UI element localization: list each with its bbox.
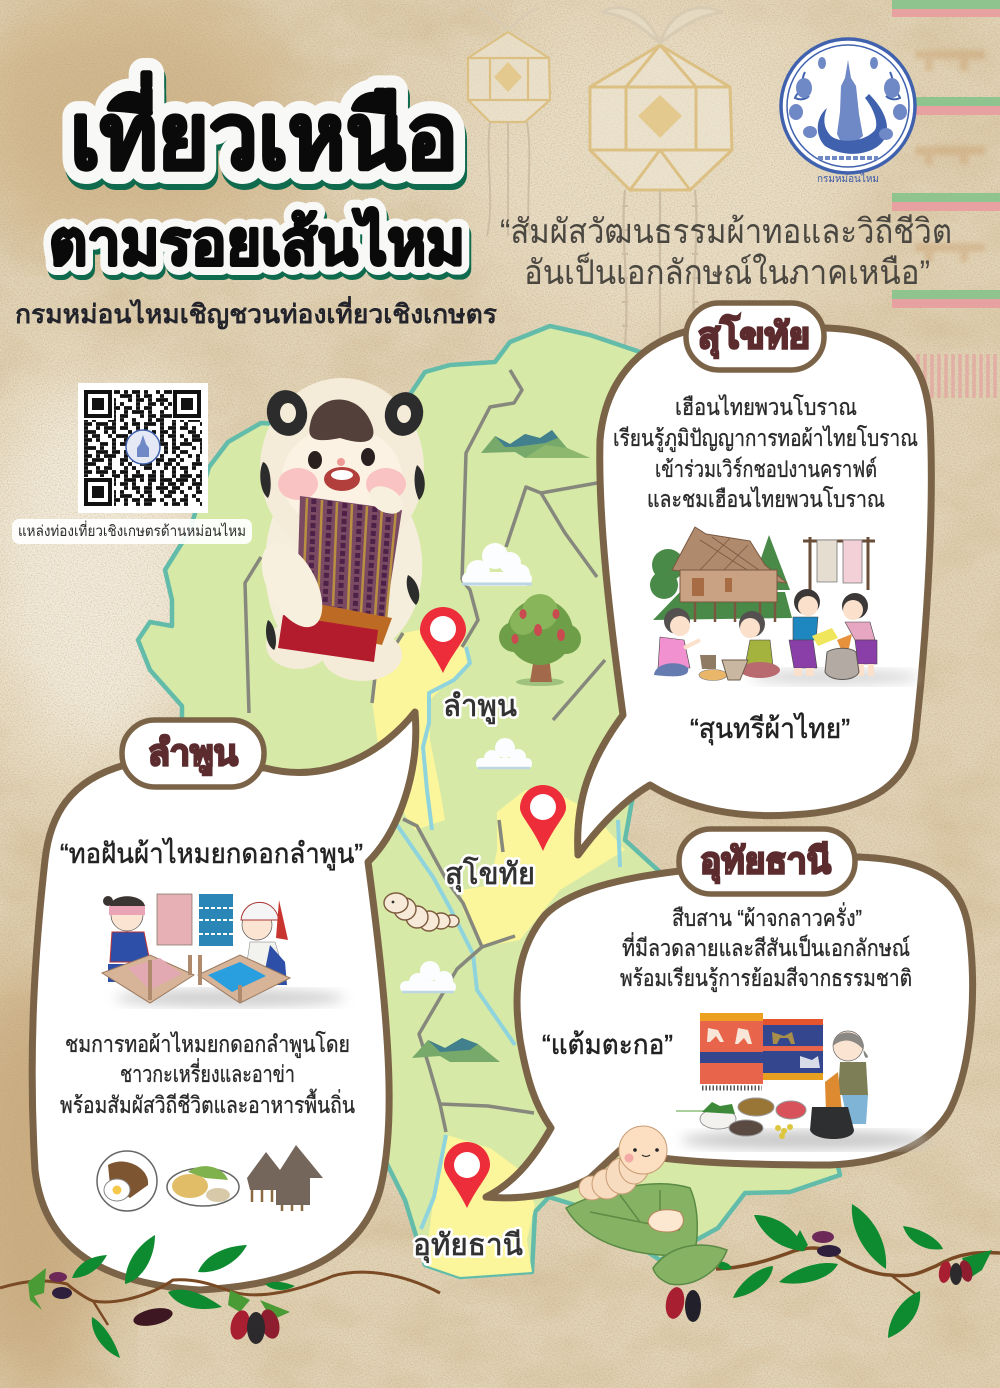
speech bubble Sukhothai [578, 328, 931, 855]
text Uthai Thani: พร้อมเรียนรู้การย้อมสีจากธรรมชาติ [620, 965, 912, 992]
text Sukhothai: และชมเฮือนไทยพวนโบราณ [647, 486, 885, 512]
title: เที่ยวเหนือ [72, 77, 460, 194]
callout Lamphun: “ทอฝันผ้าไหมยกดอกลำพูน” [60, 838, 363, 871]
icon: mountains bottom [412, 1038, 500, 1062]
heading tag Sukhothai [686, 303, 824, 370]
QR code [78, 383, 208, 513]
text Lamphun: ชาวกะเหรี่ยงและอาข่า [120, 1058, 295, 1087]
heading tag Sukhothai: สุโขทัย [698, 314, 810, 359]
lantern: small [468, 8, 550, 236]
map label: Sukhothai: สุโขทัย [445, 856, 535, 893]
heading tag Lamphun [122, 720, 264, 787]
map label: Lamphun: ลำพูน [443, 690, 517, 724]
panel: Lamphun [32, 712, 416, 1290]
icon: clouds [400, 543, 532, 993]
map: rivers [397, 647, 620, 1229]
text Sukhothai: เรียนรู้ภูมิปัญญาการทอผ้าไทยโบราณ [613, 425, 918, 452]
text Sukhothai [613, 394, 918, 512]
text Sukhothai: เข้าร่วมเวิร์กชอปงานคราฟต์ [655, 456, 877, 482]
callout Sukhothai: “สุนทรีผ้าไทย” [690, 713, 850, 746]
illustration: house and villagers [650, 527, 920, 685]
illustration: natural dye and textiles [676, 1013, 931, 1150]
quote: “สัมผัสวัฒนธรรมผ้าทอและวิถีชีวิต [500, 213, 952, 251]
heading tag Lamphun: ลำพูน [148, 732, 238, 776]
title: ตามรอยเส้นไหม [49, 207, 465, 278]
mascot fabric [297, 496, 402, 620]
lantern: large [590, 8, 732, 345]
heading tag Uthai Thani: อุทัยธานี [700, 840, 831, 884]
text Uthai Thani [620, 902, 912, 992]
icon: mountains top [481, 430, 590, 458]
logo: department seal [781, 39, 915, 185]
map: province borders [245, 370, 605, 1132]
pin: Uthai Thani [444, 1142, 490, 1208]
title: ตามรอยเส้นไหม [49, 207, 465, 278]
pin: Sukhothai [520, 785, 566, 851]
vine: bottom right [663, 1204, 1000, 1338]
title [49, 71, 467, 283]
vine: bottom left [0, 1235, 440, 1358]
icon: silkworm on map [384, 893, 459, 931]
map label: Lamphun: ลำพูน [443, 690, 517, 724]
panel: Uthai Thani [486, 829, 973, 1198]
title: เที่ยวเหนือ [70, 71, 458, 188]
map label: Uthai Thani: อุทัยธานี [413, 1229, 523, 1264]
quote [500, 213, 952, 292]
text Uthai Thani: สืบสาน “ผ้าจกลาวครั่ง” [672, 902, 862, 931]
panel: Sukhothai [578, 303, 931, 855]
map label: Sukhothai: สุโขทัย [445, 856, 535, 893]
text Lamphun: พร้อมสัมผัสวิถีชีวิตและอาหารพื้นถิ่น [60, 1089, 355, 1118]
subtitle: กรมหม่อนไหมเชิญชวนท่องเที่ยวเชิงเกษตร [15, 295, 497, 330]
text Uthai Thani: ที่มีลวดลายและสีสันเป็นเอกลักษณ์ [622, 932, 910, 961]
quote: อันเป็นเอกลักษณ์ในภาคเหนือ” [524, 252, 930, 292]
illustration: food plates and huts [97, 1145, 323, 1211]
pin: Lamphun [420, 607, 466, 673]
callout Uthai Thani: “แต้มตะกอ” [542, 1029, 673, 1060]
icon: silkworm on mulberry leaf [566, 1126, 727, 1285]
speech bubble Lamphun [32, 712, 416, 1290]
logo: department seal: กรมหม่อนไหม [817, 173, 879, 185]
text Sukhothai: เฮือนไทยพวนโบราณ [675, 394, 857, 420]
QR caption: แหล่งท่องเที่ยวเชิงเกษตรด้านหม่อนไหม [18, 520, 246, 540]
title: ตามรอยเส้นไหม [51, 212, 467, 283]
QR caption [12, 519, 252, 544]
map: base provinces [138, 326, 840, 1277]
illustration: weavers [102, 894, 345, 1007]
map label: Uthai Thani: อุทัยธานี [413, 1229, 523, 1264]
mascot [249, 378, 428, 681]
heading tag Uthai Thani [679, 829, 855, 894]
title: เที่ยวเหนือ [70, 71, 458, 188]
text Lamphun: ชมการทอผ้าไหมยกดอกลำพูนโดย [65, 1031, 350, 1058]
speech bubble Uthai Thani [486, 857, 973, 1198]
text Lamphun [60, 1031, 355, 1118]
decorative woven stripes [892, 0, 1000, 398]
icon: mulberry tree [499, 594, 581, 686]
